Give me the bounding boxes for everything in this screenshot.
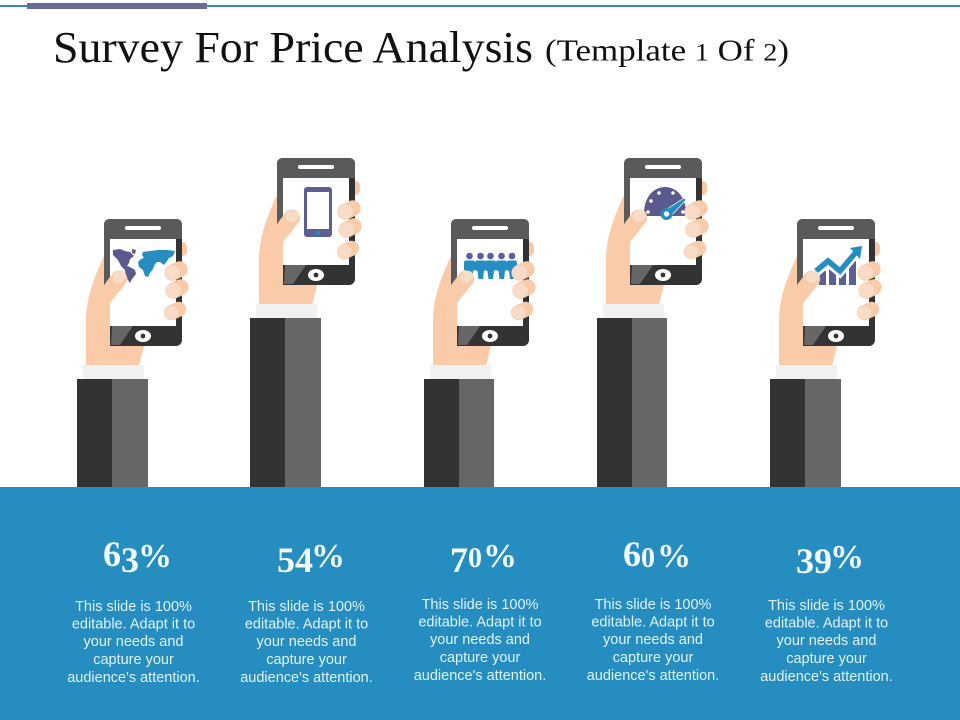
text 1: audience's attention.: [67, 670, 200, 686]
value 3: %: [483, 538, 517, 575]
value 5: 3: [796, 541, 814, 581]
value 2: %: [311, 538, 345, 575]
text 3: capture your: [440, 650, 520, 666]
text 2: editable. Adapt it to: [245, 616, 368, 632]
top rule: [0, 5, 960, 7]
hand 3: [430, 259, 538, 379]
blue band: [0, 487, 960, 720]
text 5: editable. Adapt it to: [765, 616, 888, 632]
text 4: capture your: [613, 650, 693, 666]
value 3: 7: [450, 540, 468, 580]
hand 4: [603, 198, 711, 318]
phone 3: [433, 219, 534, 366]
value 2: 4: [295, 540, 313, 580]
text 1: capture your: [93, 652, 174, 668]
icon: growth chart: [816, 246, 862, 285]
text 3: audience's attention.: [414, 668, 546, 684]
figure 2: hand with smartphone icon: [250, 158, 364, 487]
figure 1: hand with world map phone: [77, 219, 191, 487]
text 4: your needs and: [603, 632, 703, 648]
stat 3: [414, 538, 546, 684]
text 1: editable. Adapt it to: [72, 616, 195, 632]
hand 2: [256, 198, 364, 318]
text 4: editable. Adapt it to: [591, 614, 715, 630]
value 5: 9: [814, 541, 832, 581]
value 1: %: [138, 538, 172, 575]
value 2: 5: [277, 540, 295, 580]
text 2: audience's attention.: [240, 670, 373, 686]
value 1: 6: [103, 534, 121, 574]
text 5: capture your: [786, 651, 867, 667]
text 5: your needs and: [777, 633, 876, 649]
figure 3: hand with people icon: [424, 219, 538, 487]
title: Survey For Price Analysis: [53, 22, 533, 72]
text 2: This slide is 100%: [248, 599, 365, 615]
figure 4: hand with gauge icon: [597, 158, 711, 487]
icon: gauge: [644, 187, 686, 220]
sleeve 1: [77, 379, 148, 487]
sleeve 3: [424, 379, 494, 487]
value 1: 3: [121, 540, 139, 580]
text 1: your needs and: [84, 634, 183, 650]
hand 5: [776, 259, 884, 379]
icon: world map: [113, 249, 175, 283]
text 2: your needs and: [257, 634, 356, 650]
value 3: 0: [468, 543, 482, 574]
value 4: 0: [641, 543, 655, 574]
text 2: capture your: [266, 652, 347, 668]
stat 5: [760, 539, 893, 685]
stat 4: [587, 534, 719, 684]
text 3: This slide is 100%: [422, 597, 539, 613]
text 3: editable. Adapt it to: [418, 614, 542, 630]
phone 2: [259, 158, 360, 305]
stat 1: [67, 534, 200, 686]
figure 5: hand with growth chart icon: [770, 219, 884, 487]
phone 5: [779, 219, 880, 366]
text 4: This slide is 100%: [595, 597, 712, 613]
phone 4: [606, 158, 707, 305]
value 4: 6: [623, 534, 641, 574]
sleeve 2: [250, 318, 321, 487]
hand 1: [83, 259, 191, 379]
icon: smartphone: [304, 187, 332, 237]
icon: people: [464, 253, 517, 279]
phone 1: [86, 219, 187, 366]
text 1: This slide is 100%: [75, 599, 192, 615]
value 5: %: [830, 539, 864, 576]
text 5: This slide is 100%: [768, 598, 885, 614]
text 5: audience's attention.: [760, 669, 893, 685]
stat 2: [240, 538, 373, 686]
text 3: your needs and: [430, 632, 530, 648]
sleeve 4: [597, 318, 667, 487]
text 4: audience's attention.: [587, 668, 719, 684]
subtitle: (Template 1 Of 2): [545, 32, 789, 68]
value 4: %: [657, 538, 691, 575]
sleeve 5: [770, 379, 841, 487]
top accent bar: [27, 3, 207, 9]
